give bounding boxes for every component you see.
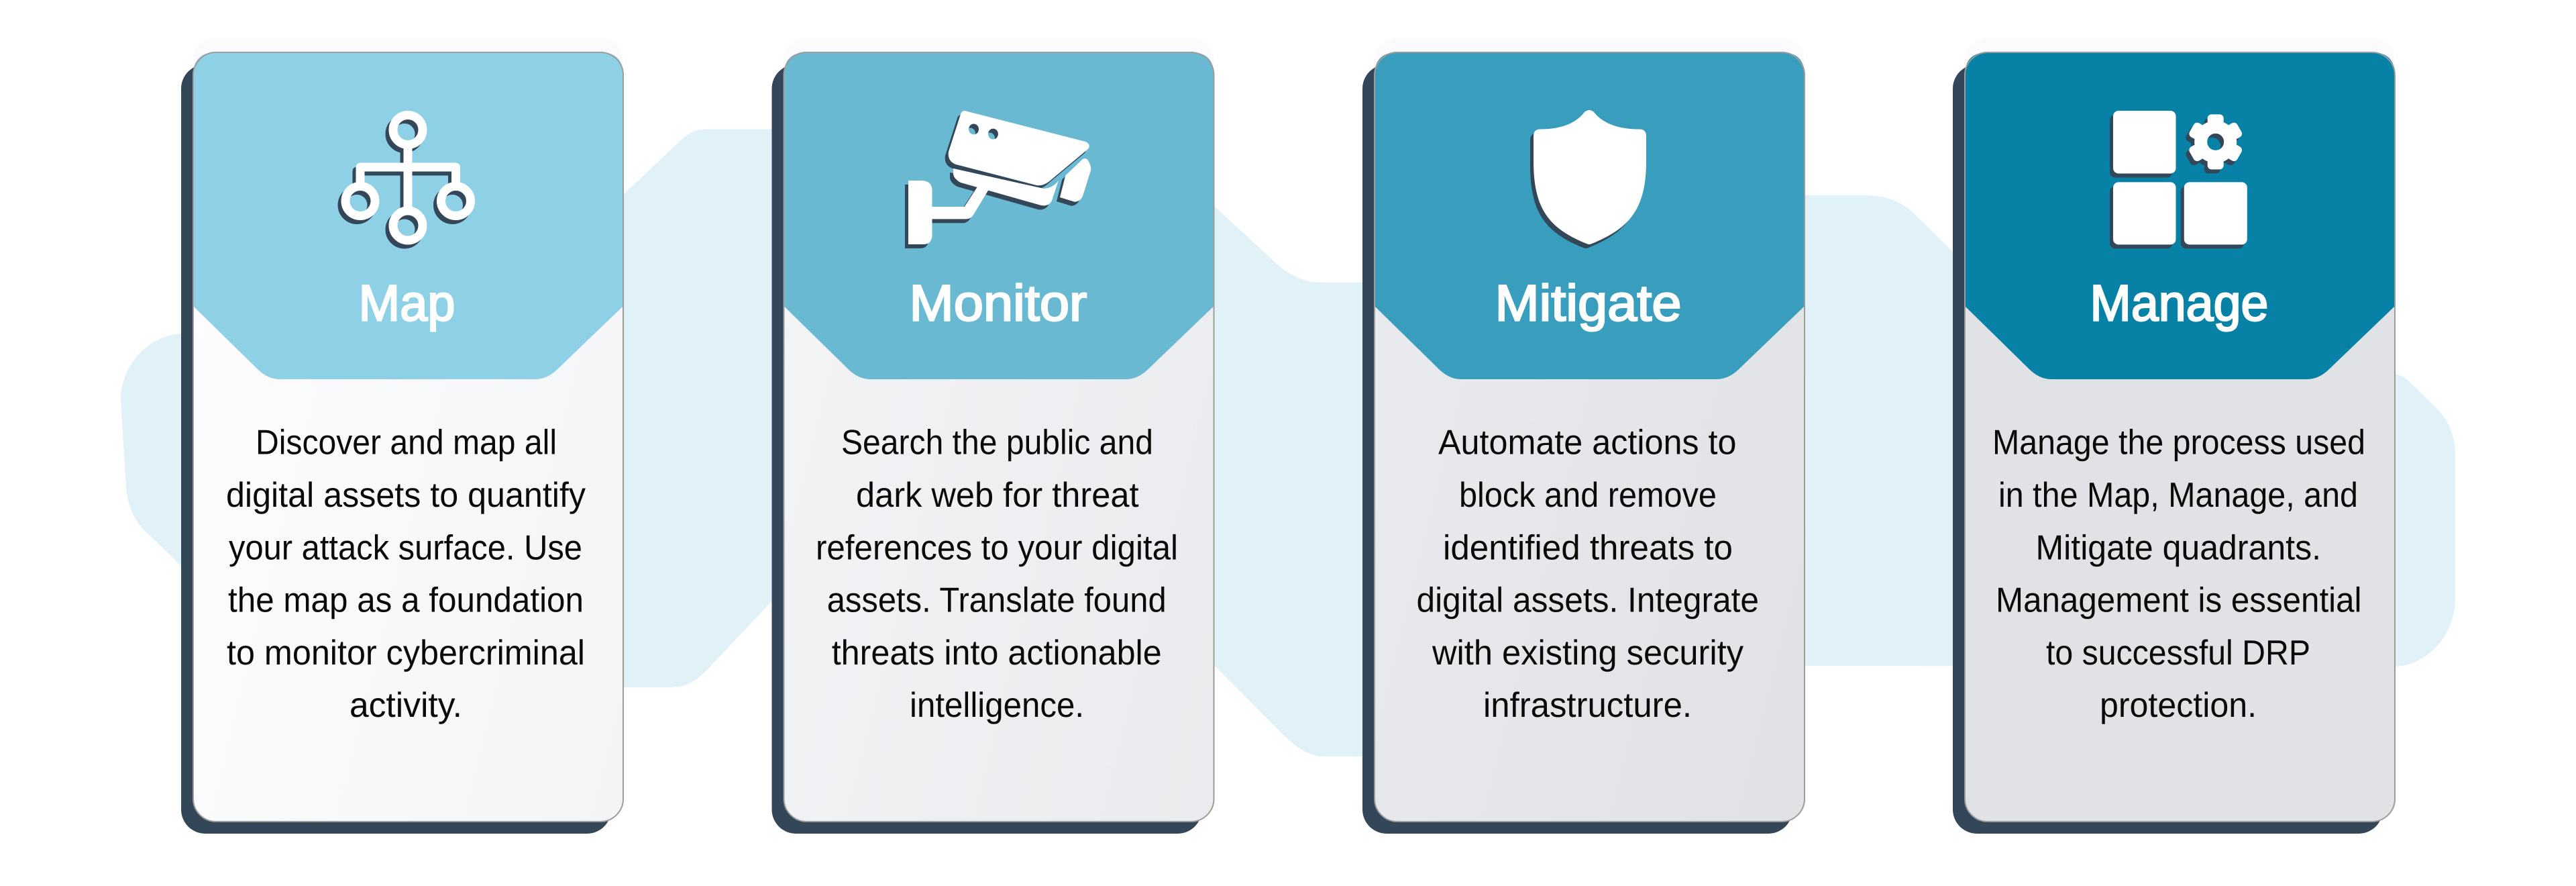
text block: Mitigate description: with existing security	[1432, 634, 1743, 673]
header: Manage	[1965, 52, 2395, 379]
text block: Manage description: to successful DRP	[2046, 634, 2310, 673]
heading: Map: Map	[358, 275, 455, 332]
icon: shield	[1530, 110, 1646, 248]
text block: Monitor description: Search the public and	[841, 424, 1153, 462]
text block: Map description: digital assets to quantify	[226, 476, 586, 515]
text block: Monitor description: assets. Translate found	[827, 581, 1167, 620]
text block: Mitigate description: infrastructure.	[1483, 686, 1692, 725]
text block: Mitigate description: Automate actions to	[1438, 424, 1736, 462]
text block: Monitor description: references to your digital	[816, 528, 1178, 567]
icon: security camera	[905, 111, 1091, 248]
text block: Map description: Discover and map all	[256, 424, 557, 462]
background blob	[121, 129, 2455, 756]
text block: Map description: activity.	[350, 686, 462, 725]
text block: Monitor description	[816, 424, 1178, 725]
text block: Monitor description: intelligence.	[910, 686, 1084, 725]
header: Map	[193, 52, 623, 379]
text block: Map description	[226, 424, 586, 725]
text block: Mitigate description: identified threats to	[1443, 528, 1733, 567]
text block: Monitor description: dark web for threat	[856, 476, 1139, 515]
text block: Manage description	[1992, 424, 2365, 725]
panel: Map	[181, 38, 623, 834]
text block: Map description: to monitor cybercriminal	[227, 634, 585, 673]
text block: Manage description: Mitigate quadrants.	[2035, 528, 2321, 567]
text block: Manage description: in the Map, Manage, and	[1998, 476, 2358, 515]
icon: network map	[342, 115, 471, 244]
text block: Manage description: Management is essential	[1996, 581, 2361, 620]
panel: Mitigate	[1362, 38, 1805, 834]
heading: Monitor: Monitor	[910, 275, 1087, 332]
text block: Mitigate description: digital assets. Integrate	[1417, 581, 1759, 620]
text block: Map description: your attack surface. Use	[229, 528, 582, 567]
text block: Manage description: Manage the process used	[1992, 424, 2365, 462]
panel: Monitor	[771, 38, 1214, 834]
text block: Map description: the map as a foundation	[228, 581, 584, 620]
heading: Manage: Manage	[2090, 275, 2269, 332]
text block: Manage description: protection.	[2100, 686, 2257, 725]
text block: Mitigate description	[1417, 424, 1759, 725]
header: Monitor	[784, 52, 1214, 379]
icon: grid with gear	[2110, 111, 2247, 248]
text block: Mitigate description: block and remove	[1459, 476, 1717, 515]
text block: Monitor description: threats into actionable	[832, 634, 1162, 673]
panel: Manage	[1953, 38, 2395, 834]
heading: Mitigate: Mitigate	[1495, 275, 1681, 332]
header: Mitigate	[1375, 52, 1805, 379]
